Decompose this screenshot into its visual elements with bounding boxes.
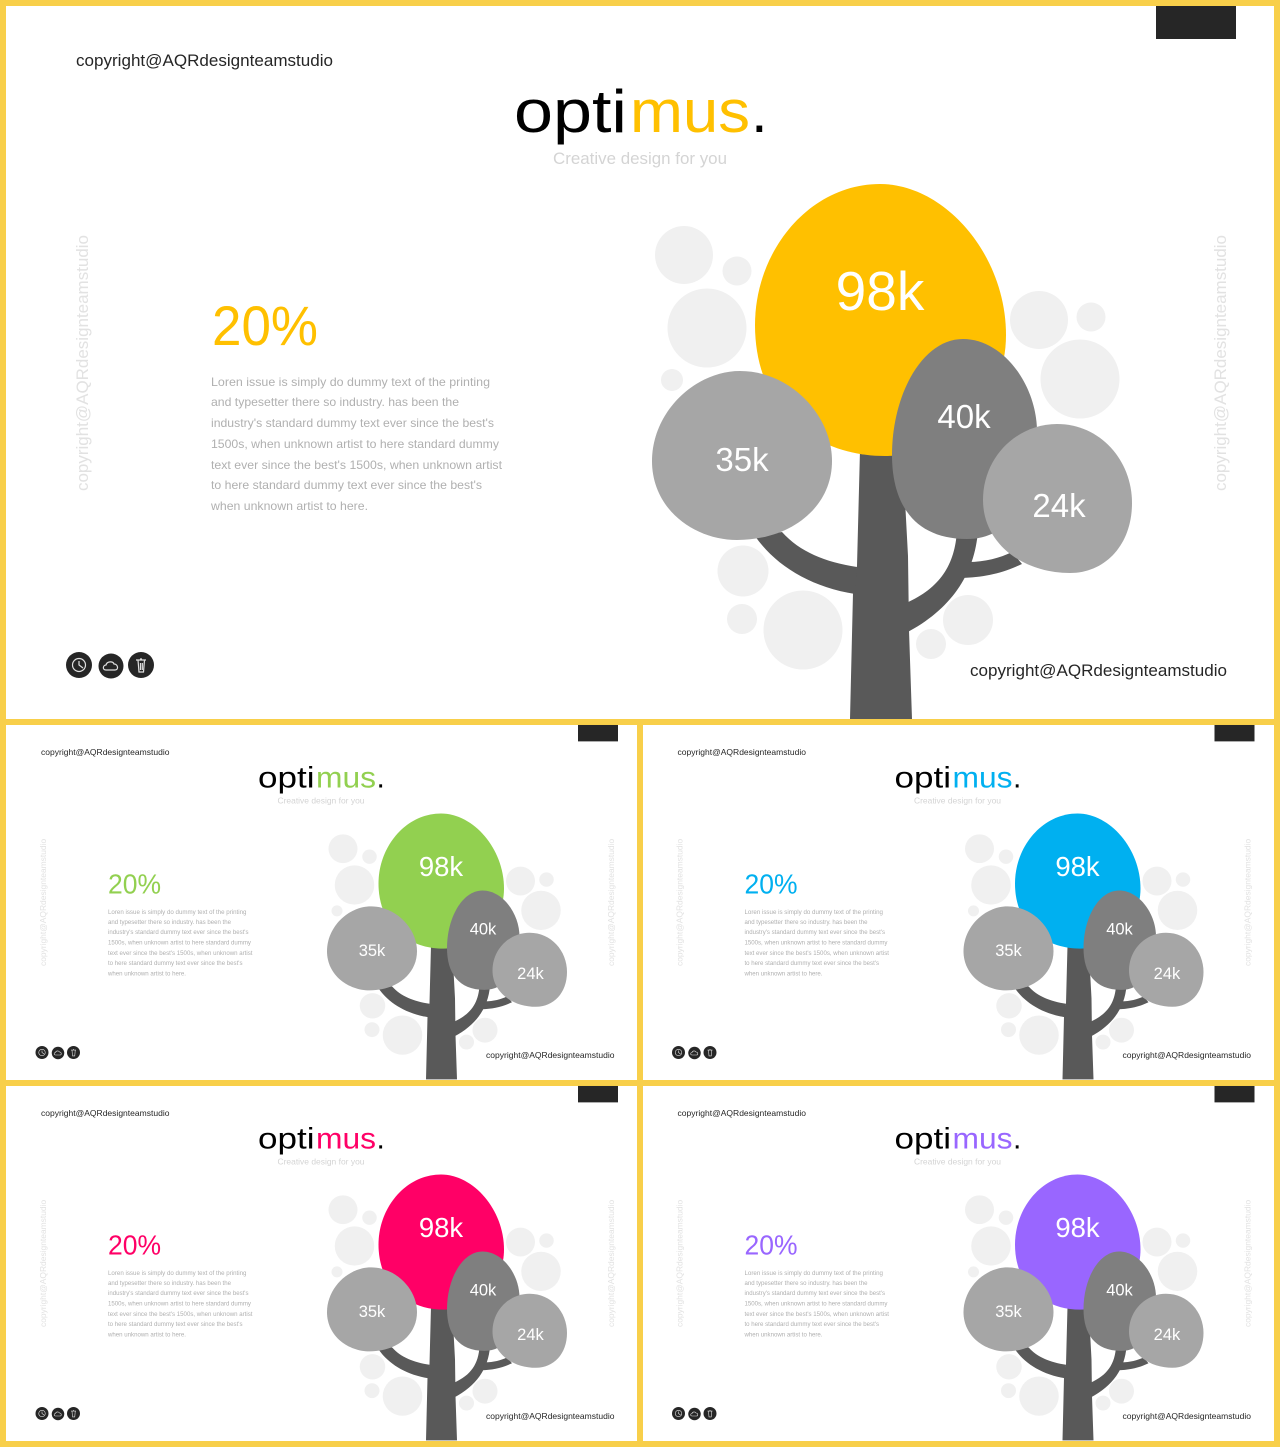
copyright top: copyright@AQRdesignteamstudio: [677, 1108, 806, 1118]
leaf: 40k: [447, 890, 520, 990]
icon: cloud: [688, 1408, 701, 1420]
title: opti: [894, 762, 951, 795]
subtitle: Creative design for you: [914, 1157, 1001, 1167]
body text: to here standard dummy text ever since the best's: [211, 478, 482, 492]
body text: industry's standard dummy text ever since the best's: [108, 1291, 249, 1297]
title: [258, 762, 385, 795]
body text: to here standard dummy text ever since the best's: [744, 1322, 879, 1328]
title: [258, 1123, 385, 1156]
panel: green slide: [6, 725, 637, 1080]
body text: [743, 1271, 889, 1338]
body text: 1500s, when unknown artist to here standard dummy: [108, 941, 251, 947]
body text: text ever since the best's 1500s, when unknown artist: [744, 951, 889, 957]
value 98k: 98k: [1055, 851, 1100, 882]
value 24k: 24k: [1032, 487, 1086, 524]
panel: purple slide: [643, 1086, 1274, 1441]
title: opti: [258, 1123, 314, 1156]
panel: blue slide: [643, 725, 1274, 1080]
value 35k: 35k: [359, 942, 386, 960]
copyright bottom: copyright@AQRdesignteamstudio: [486, 1050, 615, 1060]
body text: [743, 910, 889, 977]
vertical watermark left: copyright@AQRdesignteamstudio: [674, 1200, 685, 1327]
vertical watermark right: copyright@AQRdesignteamstudio: [606, 839, 616, 966]
body text: Loren issue is simply do dummy text of the printing: [211, 375, 490, 389]
percentage: 20%: [744, 869, 797, 899]
icon: cloud: [688, 1047, 701, 1059]
title: opti: [258, 762, 314, 795]
vertical watermark left: copyright@AQRdesignteamstudio: [38, 839, 48, 966]
leaf: 98k: [378, 813, 504, 949]
body text: Loren issue is simply do dummy text of the printing: [744, 1271, 883, 1277]
icon: cloud: [98, 654, 124, 678]
dark corner tab: [1214, 725, 1254, 741]
body text: text ever since the best's 1500s, when unknown artist: [108, 1312, 253, 1318]
body text: [107, 1271, 253, 1338]
copyright bottom: copyright@AQRdesignteamstudio: [1122, 1050, 1251, 1060]
vertical watermark right: copyright@AQRdesignteamstudio: [606, 1200, 616, 1327]
body text: text ever since the best's 1500s, when unknown artist: [211, 458, 503, 472]
body text: to here standard dummy text ever since the best's: [744, 961, 879, 967]
dark corner tab: [578, 1086, 618, 1102]
body text: and typesetter there so industry. has been the: [744, 1281, 868, 1287]
background bubbles: [965, 834, 1197, 1055]
value 35k: 35k: [995, 1303, 1023, 1321]
icon: clock: [36, 1407, 48, 1420]
title: .: [1013, 1123, 1021, 1156]
icon: trash: [704, 1407, 716, 1420]
value 98k: 98k: [419, 851, 463, 882]
body text: industry's standard dummy text ever since the best's: [108, 930, 249, 936]
vertical watermark right: copyright@AQRdesignteamstudio: [1211, 235, 1230, 491]
icon: clock: [672, 1046, 685, 1059]
leaf: 35k: [327, 1267, 417, 1351]
copyright top: copyright@AQRdesignteamstudio: [41, 747, 170, 757]
title: .: [751, 78, 768, 145]
body text: text ever since the best's 1500s, when unknown artist: [108, 951, 253, 957]
body text: industry's standard dummy text ever since the best's: [211, 416, 494, 430]
copyright top: copyright@AQRdesignteamstudio: [76, 51, 333, 70]
value 24k: 24k: [517, 965, 545, 983]
leaf: 40k: [892, 339, 1037, 539]
title: .: [1013, 762, 1021, 795]
percentage: 20%: [108, 1230, 161, 1260]
percentage: 20%: [212, 294, 318, 357]
title: mus: [316, 762, 376, 795]
value 98k: 98k: [1055, 1212, 1100, 1243]
background bubbles: [328, 834, 561, 1055]
icon: cloud: [52, 1047, 64, 1059]
leaf: 98k: [1015, 813, 1140, 949]
leaf: 24k: [492, 933, 567, 1007]
body text: to here standard dummy text ever since the best's: [108, 1322, 243, 1328]
value 35k: 35k: [715, 441, 769, 478]
background bubbles: [965, 1195, 1197, 1416]
vertical watermark left: copyright@AQRdesignteamstudio: [38, 1200, 48, 1327]
body text: Loren issue is simply do dummy text of the printing: [108, 1271, 247, 1277]
leaf: 35k: [327, 906, 417, 990]
leaf: 40k: [1084, 1251, 1156, 1351]
dark corner tab: [1214, 1086, 1254, 1102]
icon: trash: [67, 1407, 80, 1420]
leaf: 24k: [983, 424, 1132, 573]
body text: when unknown artist to here.: [743, 1332, 823, 1338]
body text: and typesetter there so industry. has been the: [744, 920, 868, 926]
value 40k: 40k: [470, 1282, 497, 1300]
body text: when unknown artist to here.: [743, 971, 823, 977]
value 35k: 35k: [995, 942, 1023, 960]
subtitle: Creative design for you: [553, 149, 727, 168]
value 40k: 40k: [1106, 1282, 1134, 1300]
title: [514, 78, 768, 145]
title: mus: [952, 762, 1013, 795]
background bubbles: [328, 1195, 561, 1416]
leaf: 40k: [447, 1251, 520, 1351]
vertical watermark left: copyright@AQRdesignteamstudio: [73, 235, 92, 491]
tree trunk and branches: [378, 946, 512, 1079]
copyright bottom: copyright@AQRdesignteamstudio: [1122, 1411, 1251, 1421]
title: .: [376, 1123, 385, 1156]
vertical watermark right: copyright@AQRdesignteamstudio: [1242, 839, 1253, 966]
title: [894, 762, 1021, 795]
leaf: 24k: [492, 1294, 567, 1368]
title: .: [376, 762, 385, 795]
body text: and typesetter there so industry. has been the: [108, 1281, 232, 1287]
percentage: 20%: [744, 1230, 797, 1260]
body text: text ever since the best's 1500s, when unknown artist: [744, 1312, 889, 1318]
value 24k: 24k: [1154, 965, 1181, 983]
leaf: 35k: [652, 371, 832, 540]
icon: clock: [672, 1407, 685, 1420]
leaf: 40k: [1084, 890, 1156, 990]
value 40k: 40k: [937, 398, 991, 435]
subtitle: Creative design for you: [278, 796, 365, 806]
icon: trash: [128, 652, 154, 678]
body text: industry's standard dummy text ever since the best's: [744, 930, 885, 936]
value 35k: 35k: [359, 1303, 386, 1321]
icon: cloud: [52, 1408, 64, 1420]
value 24k: 24k: [517, 1326, 545, 1344]
panel: main slide (amber): [6, 6, 1274, 719]
body text: Loren issue is simply do dummy text of the printing: [108, 910, 247, 916]
value 40k: 40k: [1106, 921, 1134, 939]
copyright top: copyright@AQRdesignteamstudio: [41, 1108, 170, 1118]
subtitle: Creative design for you: [914, 796, 1001, 806]
icon: trash: [67, 1046, 80, 1059]
body text: when unknown artist to here.: [107, 1332, 186, 1338]
panel: pink slide: [6, 1086, 637, 1441]
tree trunk and branches: [1015, 1307, 1148, 1440]
copyright top: copyright@AQRdesignteamstudio: [677, 747, 806, 757]
leaf: 35k: [964, 1267, 1054, 1351]
body text: 1500s, when unknown artist to here standard dummy: [744, 941, 888, 947]
dark corner tab: [1156, 6, 1236, 39]
leaf: 24k: [1129, 1294, 1204, 1368]
copyright bottom: copyright@AQRdesignteamstudio: [486, 1411, 615, 1421]
copyright bottom: copyright@AQRdesignteamstudio: [970, 661, 1227, 680]
value 98k: 98k: [419, 1212, 463, 1243]
vertical watermark right: copyright@AQRdesignteamstudio: [1242, 1200, 1253, 1327]
title: mus: [316, 1123, 376, 1156]
subtitle: Creative design for you: [278, 1157, 365, 1167]
leaf: 98k: [755, 184, 1006, 456]
icon: trash: [704, 1046, 716, 1059]
value 98k: 98k: [836, 260, 925, 322]
tree trunk and branches: [755, 450, 1022, 719]
leaf: 98k: [1015, 1174, 1140, 1310]
leaf: 24k: [1129, 933, 1204, 1007]
body text: 1500s, when unknown artist to here standard dummy: [211, 437, 499, 451]
leaf: 98k: [378, 1174, 504, 1310]
tree trunk and branches: [1015, 946, 1148, 1079]
leaf: 35k: [964, 906, 1054, 990]
body text: and typesetter there so industry. has been the: [211, 395, 459, 409]
body text: 1500s, when unknown artist to here standard dummy: [744, 1302, 888, 1308]
body text: and typesetter there so industry. has been the: [108, 920, 232, 926]
dark corner tab: [578, 725, 618, 741]
value 24k: 24k: [1154, 1326, 1181, 1344]
body text: when unknown artist to here.: [107, 971, 186, 977]
icon: clock: [66, 652, 92, 678]
body text: when unknown artist to here.: [210, 499, 368, 513]
body text: Loren issue is simply do dummy text of the printing: [744, 910, 883, 916]
body text: industry's standard dummy text ever since the best's: [744, 1291, 885, 1297]
background bubbles: [655, 226, 1120, 670]
body text: 1500s, when unknown artist to here standard dummy: [108, 1302, 251, 1308]
value 40k: 40k: [470, 921, 497, 939]
title: mus: [630, 78, 750, 145]
body text: [107, 910, 253, 977]
icon: clock: [36, 1046, 48, 1059]
title: opti: [894, 1123, 951, 1156]
title: opti: [514, 78, 627, 145]
percentage: 20%: [108, 869, 161, 899]
body text: to here standard dummy text ever since the best's: [108, 961, 243, 967]
body text: [210, 375, 503, 513]
title: [894, 1123, 1021, 1156]
vertical watermark left: copyright@AQRdesignteamstudio: [674, 839, 685, 966]
title: mus: [952, 1123, 1013, 1156]
tree trunk and branches: [378, 1307, 512, 1440]
